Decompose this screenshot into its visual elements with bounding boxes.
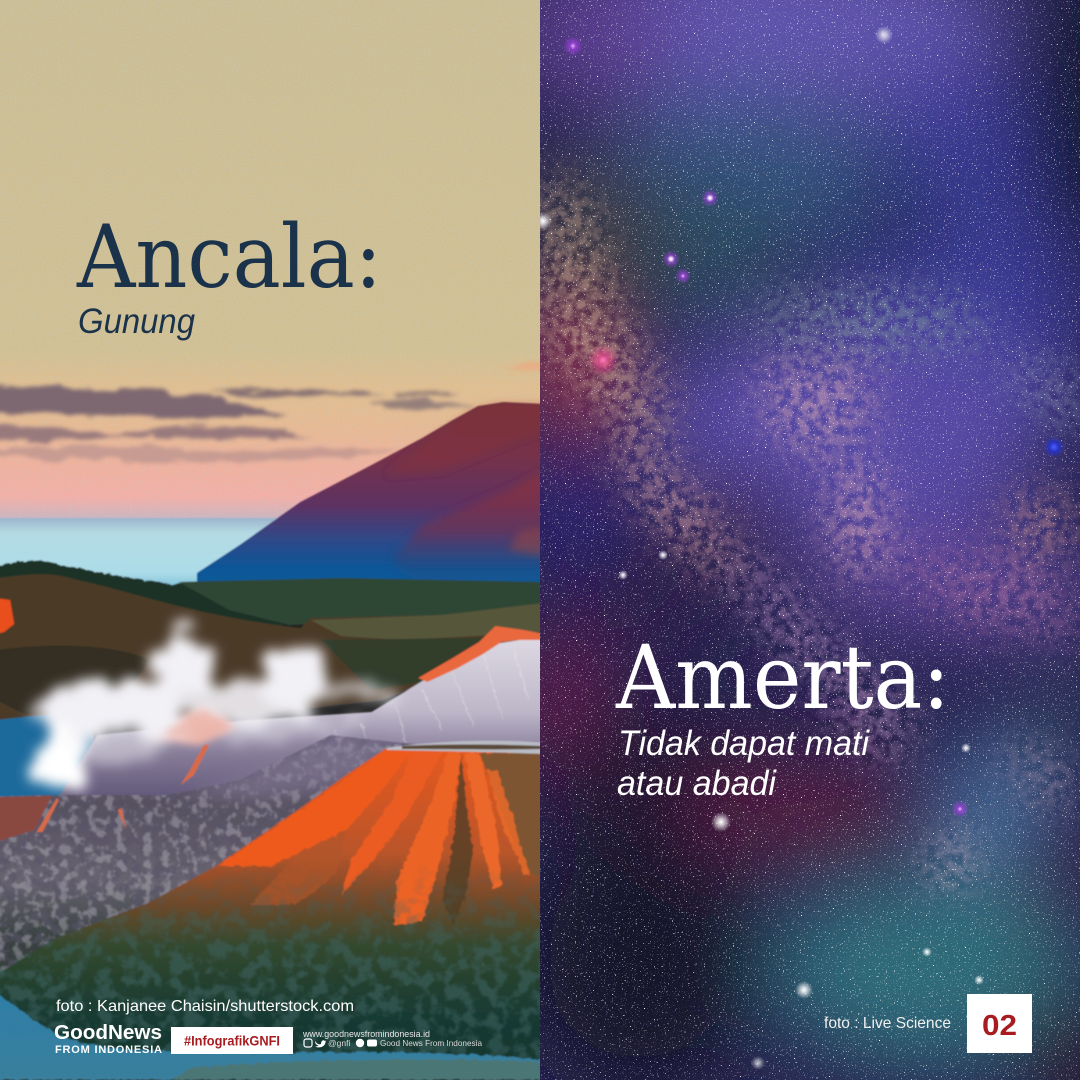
page name: Good News From Indonesia [380,1038,482,1048]
glowing stars [534,26,1064,1070]
orange face [217,750,544,925]
middle hills [179,578,544,625]
logo: GoodNews From Indonesia [54,1024,162,1053]
forest ridge [0,559,290,626]
website and social links: www.goodnewsfromindonesia.id [302,1029,430,1039]
definition: Tidak dapat mati atau abadi [617,724,870,803]
icon: facebook [356,1039,364,1047]
icon: twitter [315,1040,326,1047]
heading: Ancala: Ancala: [76,206,382,308]
page number box: 02 [982,1010,1017,1042]
panel: Amerta galaxy sky [505,0,1080,1080]
sky grain [0,0,540,530]
icon: youtube [367,1040,377,1046]
river water [0,993,544,1080]
logo: GoodNews From Indonesia: GoodNews [54,1022,162,1044]
crater wall red rim [0,796,52,842]
heading: Amerta: Amerta: [615,626,950,729]
steam plumes [31,628,392,796]
social handle: @gnfi [328,1038,350,1048]
website and social links [302,1029,482,1048]
definition: Tidak dapat mati atau abadi: atau abadi [617,764,777,803]
pink cone highlight [163,708,231,740]
definition: Gunung: Gunung [78,302,195,341]
slope ridges [334,656,528,744]
orange ridge on slope [418,626,544,682]
nebula colour clouds [505,0,1080,1080]
logo: GoodNews From Indonesia: FROM INDONESIA [55,1044,162,1056]
grey ridged crater wall [0,734,414,973]
sea of clouds [0,518,290,586]
distant volcano [197,402,544,590]
bright star specks [540,0,1080,1080]
star field [540,0,1080,1080]
galaxy base [540,0,1080,1080]
river bank [174,1060,544,1080]
Batok volcano body [0,745,544,1080]
panel: Ancala mountain landscape [0,0,554,1080]
landscape artwork [0,402,554,1080]
glowing crater edge left [0,598,14,634]
page number box [967,994,1032,1053]
milky way dust [540,170,1080,890]
crater rim [387,741,544,754]
sky [0,0,540,530]
photo credit right: foto : Live Science [824,1015,951,1032]
forest texture [0,868,540,1080]
haze over crater wall top [179,735,402,800]
white slope [60,638,540,796]
icon: instagram [304,1039,312,1047]
hashtag badge [171,1027,293,1054]
dark blue crater [0,714,94,798]
sunset clouds [0,360,550,462]
photo credit left: foto : Kanjanee Chaisin/shutterstock.com [56,998,354,1015]
definition: Tidak dapat mati atau abadi: Tidak dapat mati [618,724,870,763]
crater orange streak [37,745,209,832]
pink cone [150,704,238,745]
hashtag badge: #InfografikGNFI [184,1034,280,1048]
